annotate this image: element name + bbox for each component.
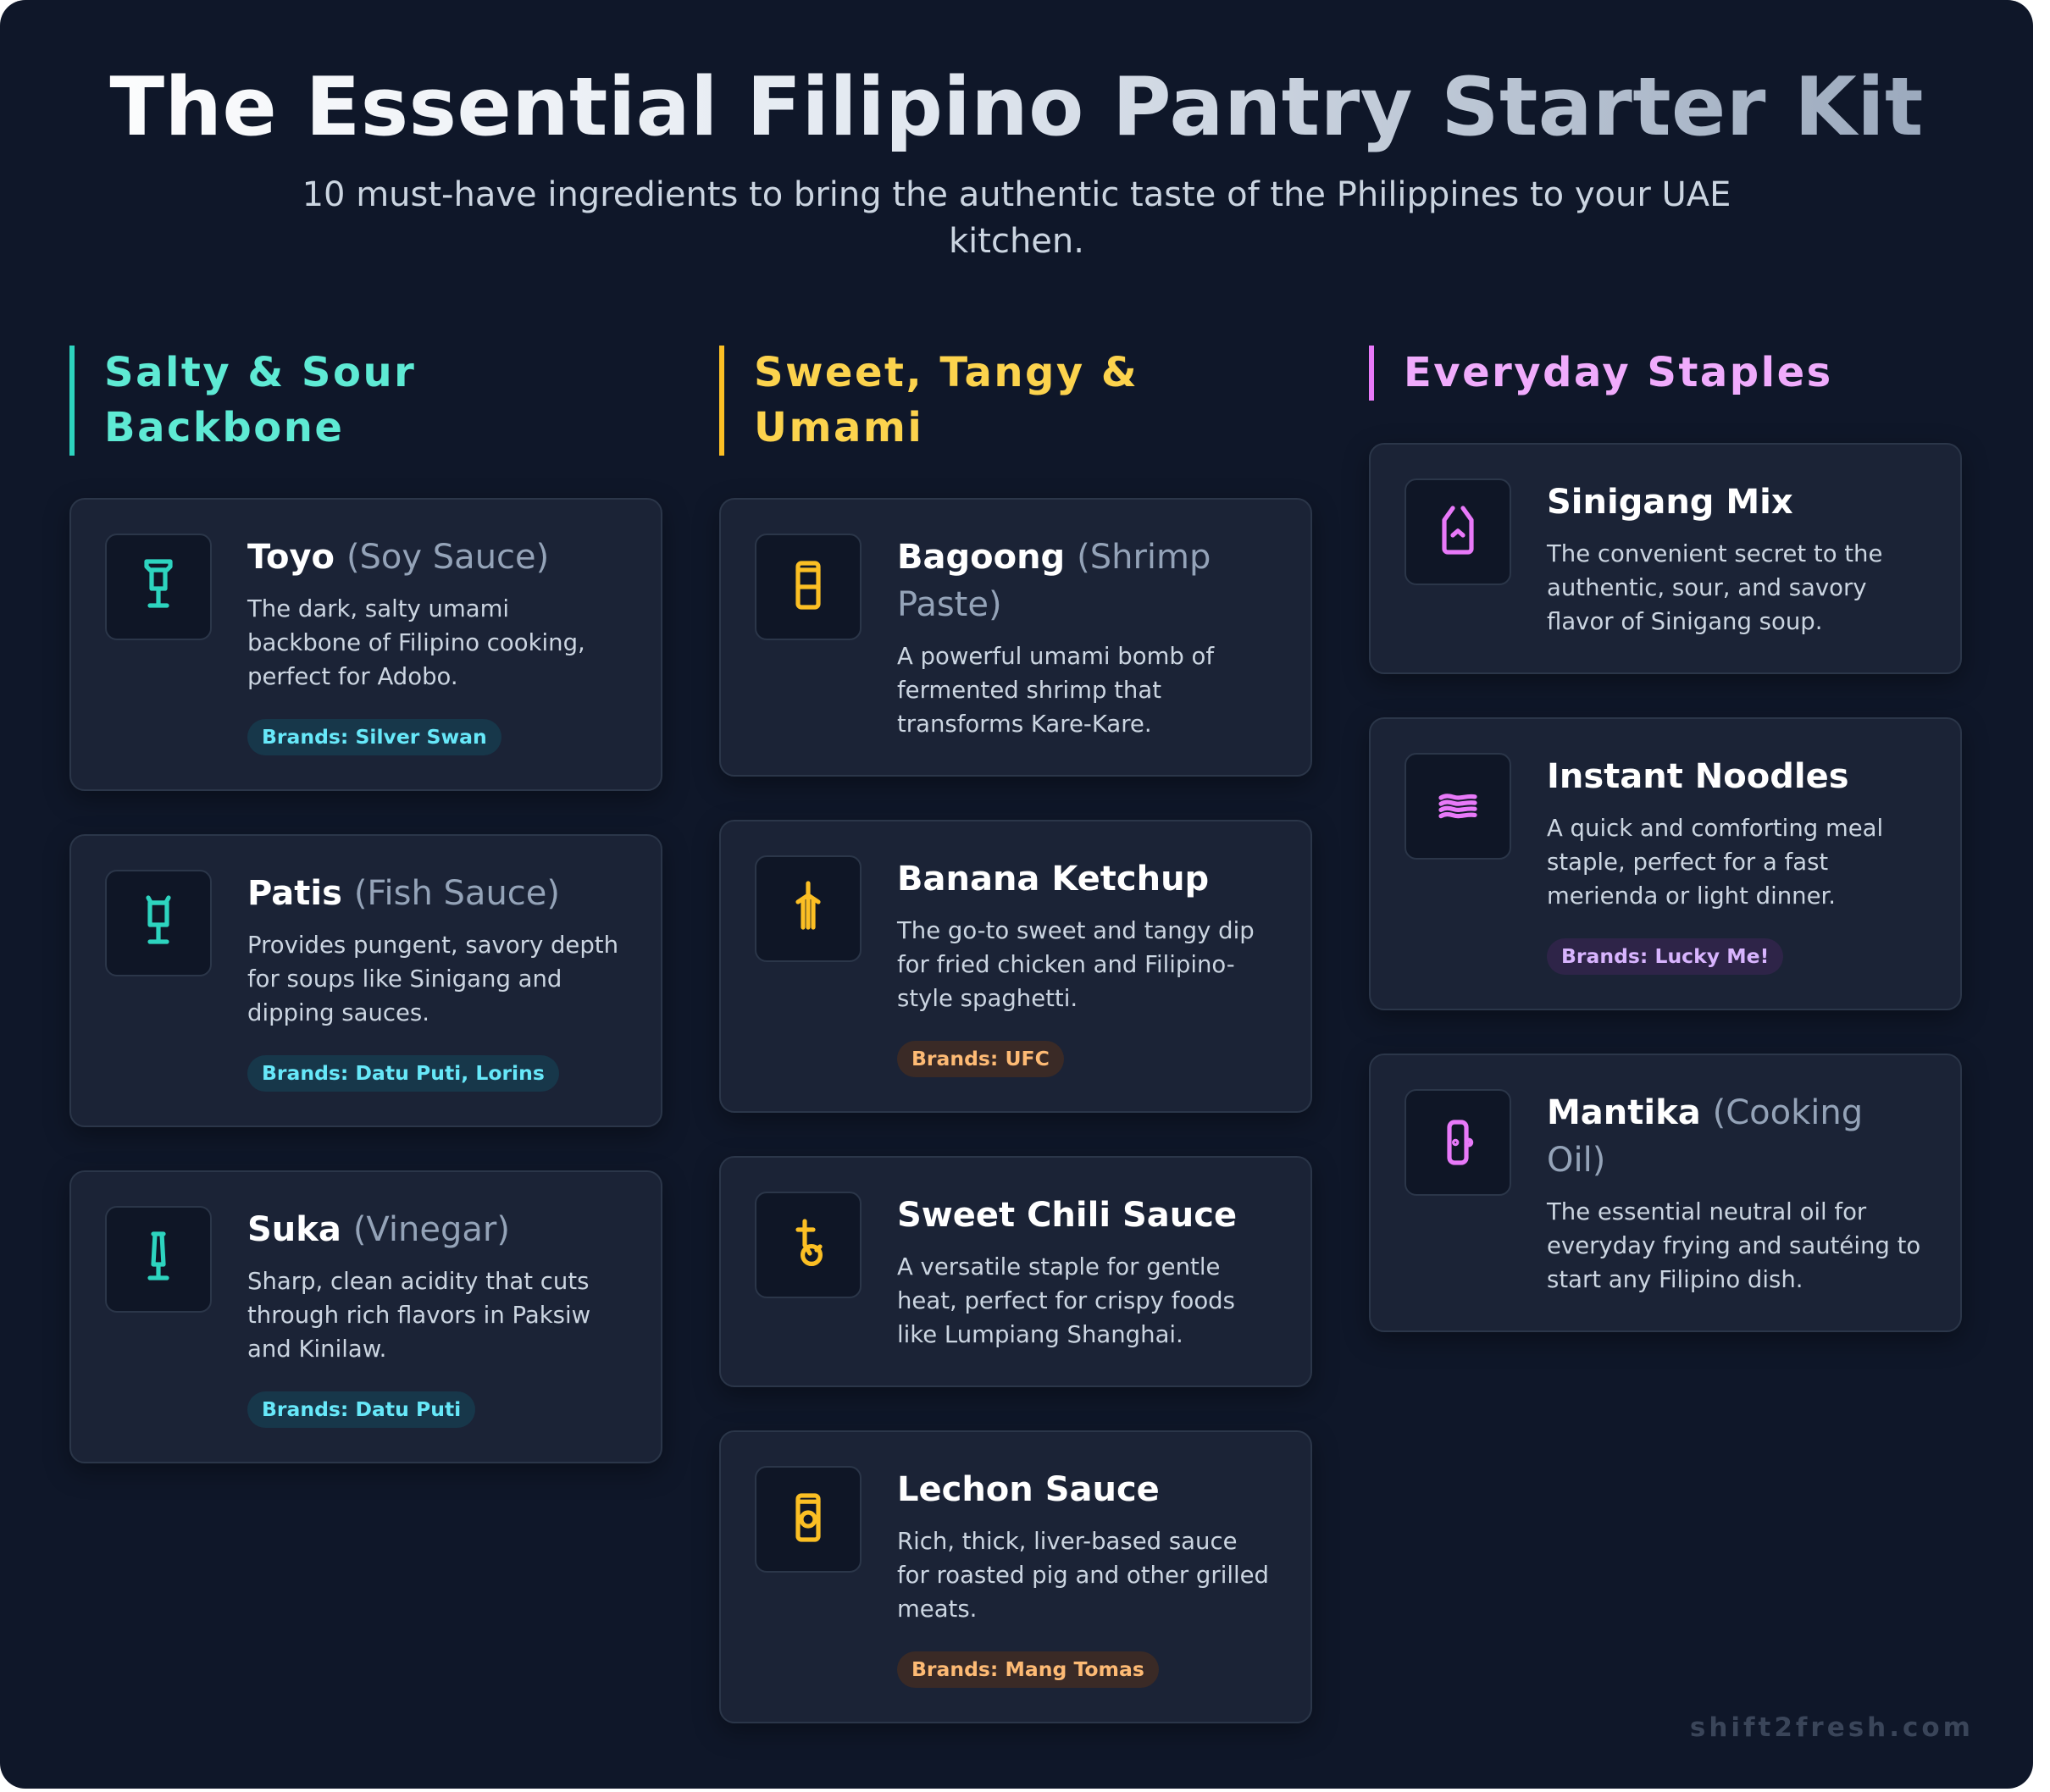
icon: fish sauce	[105, 870, 212, 976]
card: Sweet Chili Sauce: A versatile staple for gentle	[897, 1253, 1220, 1280]
card: Instant Noodles: staple, perfect for a fast	[1547, 849, 1828, 876]
icon: oil bottle	[1405, 1089, 1511, 1196]
column: sweet tangy umami	[719, 346, 1312, 1730]
card: Patis: Brands: Datu Puti, Lorins	[262, 1061, 545, 1085]
card: Lechon Sauce: for roasted pig and other grilled	[897, 1562, 1269, 1589]
card: Patis: Provides pungent, savory depth	[247, 932, 618, 959]
card: Toyo: backbone of Filipino cooking,	[247, 629, 585, 656]
card: Mantika: everyday frying and sautéing to	[1547, 1232, 1920, 1259]
card: Sinigang Mix: flavor of Sinigang soup.	[1547, 608, 1822, 635]
card: Suka: through rich flavors in Paksiw	[247, 1302, 590, 1329]
card: Toyo: Brands: Silver Swan	[262, 725, 487, 749]
icon: packet	[1405, 478, 1511, 585]
card: Banana Ketchup: style spaghetti.	[897, 985, 1078, 1012]
heading: Everyday Staples	[1369, 346, 1962, 401]
subtitle: 10 must-have ingredients to bring the authentic taste of the Philippines to your UAE kitchen.	[302, 175, 1731, 261]
card: Patis: Patis (Fish Sauce)	[247, 874, 560, 913]
icon: jar	[755, 534, 862, 640]
column: everyday staples	[1369, 346, 1962, 1339]
card: Mantika: Mantika (Cooking	[1547, 1093, 1863, 1132]
card: Toyo	[69, 498, 662, 791]
card: Lechon Sauce: meats.	[897, 1596, 977, 1623]
card: Lechon Sauce: Brands: Mang Tomas	[911, 1657, 1144, 1681]
card: Bagoong	[719, 498, 1312, 777]
card: Toyo: The dark, salty umami	[247, 595, 509, 622]
card: Mantika: The essential neutral oil for	[1547, 1198, 1866, 1225]
card: Sinigang Mix	[1369, 443, 1962, 674]
card: Toyo: Toyo (Soy Sauce)	[247, 538, 549, 577]
card: Sweet Chili Sauce: heat, perfect for crispy foods	[897, 1287, 1235, 1314]
card: Mantika: Oil)	[1547, 1141, 1605, 1180]
card: Suka: Suka (Vinegar)	[247, 1210, 510, 1249]
card: Sinigang Mix: Sinigang Mix	[1547, 483, 1793, 522]
icon: ketchup	[755, 855, 862, 962]
card: Banana Ketchup: Brands: UFC	[911, 1047, 1050, 1070]
icon: soy sauce	[105, 534, 212, 640]
card: Toyo: perfect for Adobo.	[247, 663, 458, 690]
footer: website: shift2fresh.com	[1690, 1712, 1974, 1743]
icon: sauce jar	[755, 1466, 862, 1573]
card: Sweet Chili Sauce: Sweet Chili Sauce	[897, 1196, 1237, 1235]
card: Sinigang Mix: authentic, sour, and savory	[1547, 574, 1867, 601]
card: Instant Noodles: A quick and comforting meal	[1547, 815, 1883, 842]
card: Mantika: start any Filipino dish.	[1547, 1266, 1803, 1293]
card: Banana Ketchup: Banana Ketchup	[897, 860, 1209, 899]
card: Patis	[69, 834, 662, 1127]
card: Suka	[69, 1170, 662, 1463]
heading: Everyday Staples: Everyday Staples	[1404, 349, 1833, 396]
card: Lechon Sauce: Rich, thick, liver-based sauce	[897, 1528, 1238, 1555]
heading: Salty & Sour Backbone: Salty & Sour Backbone	[104, 349, 416, 451]
card: Bagoong: fermented shrimp that	[897, 677, 1161, 704]
icon: vinegar	[105, 1206, 212, 1313]
card: Mantika	[1369, 1054, 1962, 1332]
card: Instant Noodles: Instant Noodles	[1547, 757, 1849, 796]
card: Patis: for soups like Sinigang and	[247, 965, 562, 993]
card: Instant Noodles: merienda or light dinner.	[1547, 882, 1836, 910]
card: Sweet Chili Sauce: like Lumpiang Shanghai.	[897, 1321, 1183, 1348]
card: Sweet Chili Sauce	[719, 1156, 1312, 1387]
heading: Sweet, Tangy & Umami	[719, 346, 1312, 456]
column: salty & sour	[69, 346, 662, 1470]
card: Instant Noodles: Brands: Lucky Me!	[1561, 944, 1769, 968]
card: Sinigang Mix: The convenient secret to the	[1547, 540, 1882, 567]
card: Bagoong: Paste)	[897, 585, 1002, 624]
card: Banana Ketchup: The go-to sweet and tangy dip	[897, 917, 1255, 944]
card: Lechon Sauce	[719, 1430, 1312, 1723]
heading: Salty & Sour Backbone	[69, 346, 662, 456]
card: Banana Ketchup: for fried chicken and Filipino-	[897, 951, 1235, 978]
heading: Sweet, Tangy & Umami: Sweet, Tangy & Umami	[754, 349, 1139, 451]
title: The Essential Filipino Pantry Starter Kit	[109, 61, 1924, 154]
card: Suka: and Kinilaw.	[247, 1336, 386, 1363]
card: Bagoong: transforms Kare-Kare.	[897, 711, 1152, 738]
icon: noodles	[1405, 753, 1511, 860]
card: Suka: Brands: Datu Puti	[262, 1397, 461, 1421]
card: Instant Noodles	[1369, 717, 1962, 1010]
card: Patis: dipping sauces.	[247, 999, 429, 1026]
card: Bagoong: A powerful umami bomb of	[897, 643, 1214, 670]
icon: chili	[755, 1192, 862, 1298]
card: Banana Ketchup	[719, 820, 1312, 1113]
card: Lechon Sauce: Lechon Sauce	[897, 1470, 1160, 1509]
card: Suka: Sharp, clean acidity that cuts	[247, 1268, 589, 1295]
card: Bagoong: Bagoong (Shrimp	[897, 538, 1211, 577]
